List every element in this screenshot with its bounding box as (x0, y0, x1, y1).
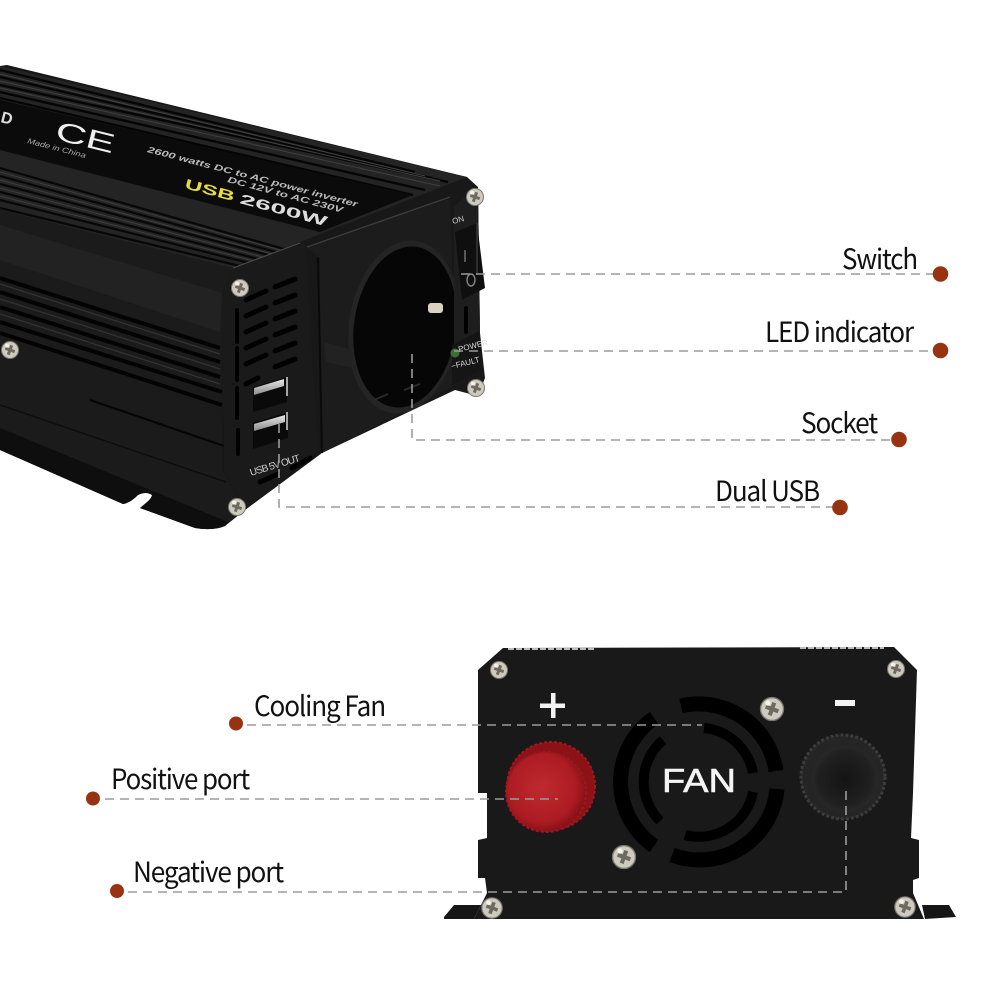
callout: Positive port: Positive port (111, 758, 251, 798)
negative terminal (801, 735, 885, 819)
side face (0, 210, 245, 522)
USB label: USB 5V OUT (249, 453, 302, 479)
socket pin (428, 303, 443, 313)
fault text: −FAULT (450, 355, 481, 371)
callout: LED indicator (454, 311, 948, 358)
callout: Cooling Fan: Cooling Fan (254, 685, 385, 725)
product: inverter angled view (0, 65, 489, 529)
socket recess (337, 233, 471, 421)
front left face with vents (222, 240, 318, 510)
top ridged surface (0, 66, 467, 268)
fan grille (621, 704, 777, 860)
callout: Dual USB (279, 424, 848, 515)
rating text: 2600 watts DC to AC power inverter (145, 144, 360, 209)
base flange (0, 428, 228, 529)
positive terminal (506, 742, 595, 832)
body silhouette (0, 65, 485, 529)
ON label: ON (451, 214, 465, 226)
callout: Negative port (110, 787, 846, 898)
FAN label: FAN (662, 762, 736, 799)
product: inverter rear view (444, 647, 956, 919)
minus sign (835, 700, 855, 706)
dual USB ports (249, 377, 302, 479)
USB model: USB (183, 175, 237, 204)
callout: Cooling Fan (229, 685, 702, 730)
callout: Negative port: Negative port (133, 851, 285, 891)
2600W model: 2600W (238, 190, 331, 230)
rear body (474, 647, 924, 919)
socket panel (307, 197, 471, 453)
label band (0, 100, 413, 232)
voltage text: DC 12V to AC 230V (226, 174, 346, 215)
callout: LED indicator: LED indicator (765, 311, 914, 351)
made in china: Made in China (26, 136, 87, 160)
callout: Socket (412, 354, 907, 447)
power text: POWER (457, 338, 489, 354)
CE mark: CE (53, 116, 118, 159)
callout: Socket: Socket (801, 402, 879, 442)
callout: Dual USB: Dual USB (715, 470, 820, 510)
callout: Switch: Switch (842, 238, 917, 278)
callout: Switch (461, 238, 948, 282)
switch rocker (451, 187, 485, 350)
screws (482, 660, 915, 918)
mounting flanges (444, 905, 956, 919)
callout: Positive port (86, 758, 558, 806)
LED indicator (450, 331, 489, 385)
plus sign (540, 693, 565, 718)
screws (2, 188, 484, 516)
